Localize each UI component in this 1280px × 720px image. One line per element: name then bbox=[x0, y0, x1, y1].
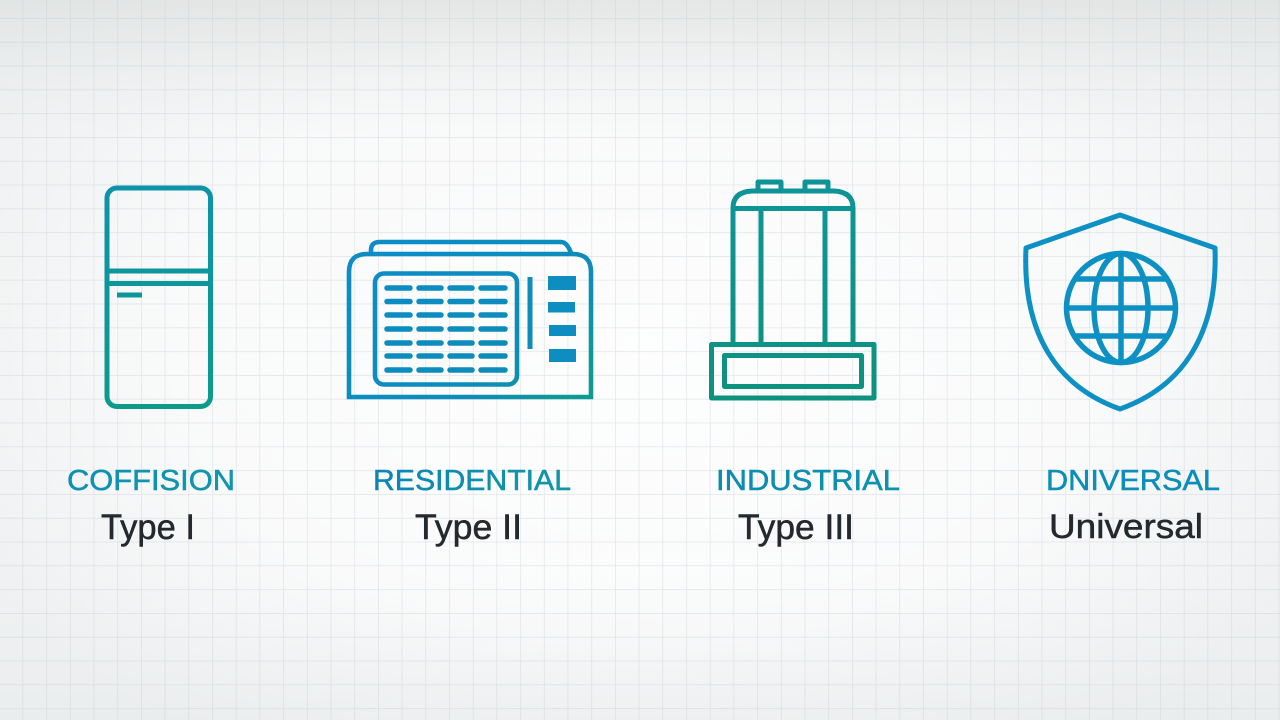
screen vent bars bbox=[387, 288, 505, 370]
icon: shield with globe bbox=[1026, 215, 1215, 409]
icon: industrial unit bbox=[712, 182, 874, 398]
control buttons bbox=[548, 276, 576, 362]
type label: Type I: Type I bbox=[101, 508, 195, 547]
category label: DNIVERSAL: DNIVERSAL bbox=[1046, 465, 1220, 497]
icon: refrigerator bbox=[107, 188, 210, 406]
column 3 labels bbox=[716, 465, 900, 547]
globe bbox=[1066, 254, 1176, 362]
category label: INDUSTRIAL: INDUSTRIAL bbox=[716, 465, 900, 497]
type label: Type II: Type II bbox=[415, 508, 522, 547]
type label: Type III: Type III bbox=[738, 508, 854, 547]
category label: COFFISION: COFFISION bbox=[67, 465, 235, 497]
icon: microwave appliance bbox=[349, 242, 591, 397]
column 4 labels bbox=[1046, 465, 1220, 546]
column 1 labels bbox=[67, 465, 235, 547]
column 2 labels bbox=[373, 465, 571, 547]
type label: Universal: Universal bbox=[1049, 508, 1203, 546]
category label: RESIDENTIAL: RESIDENTIAL bbox=[373, 465, 571, 497]
